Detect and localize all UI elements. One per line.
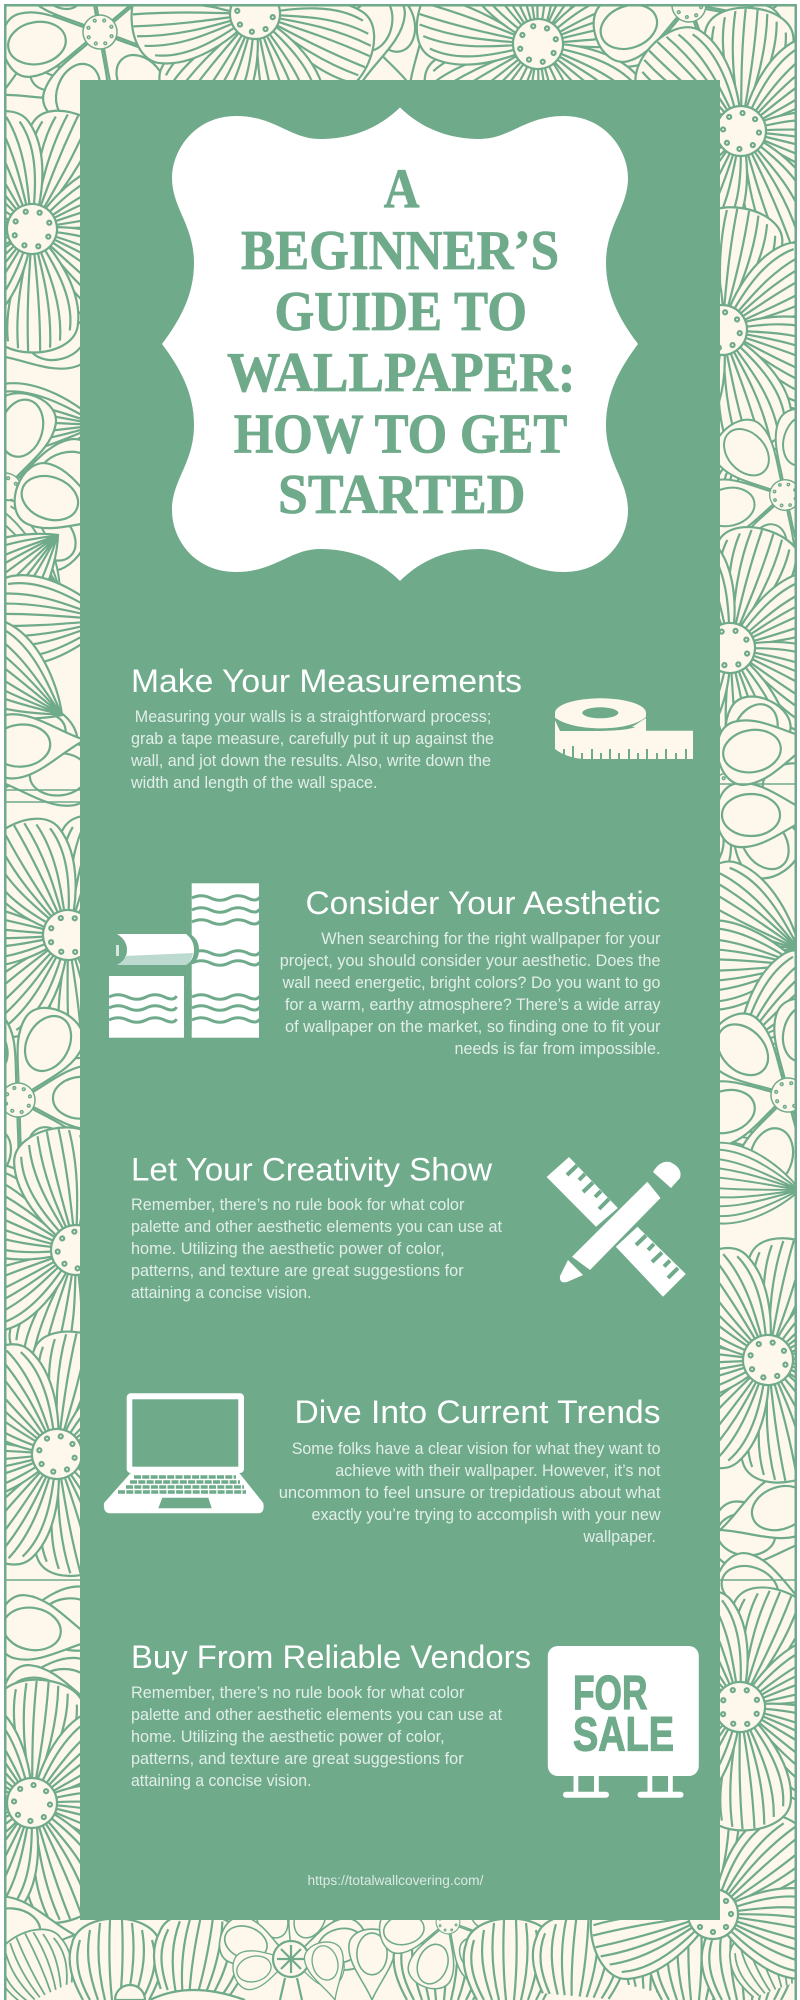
body text: wall need energetic, bright colors? Do you want to go [282,973,660,992]
green main panel [80,80,720,1920]
body text: wall, and jot down the results. Also, write down the [130,751,491,770]
title text: HOW TO GET [234,404,567,466]
body text: Measuring your walls is a straightforward process; [135,707,491,726]
body text [130,707,494,792]
body text [131,1683,502,1790]
section: dive into current trends [104,1393,661,1546]
title text: A [384,158,420,220]
scalloped white plaque [162,108,638,581]
body text: attaining a concise vision. [131,1771,312,1790]
icon: for sale sign: SALE [573,1709,674,1762]
icon: for sale sign [548,1646,699,1798]
section: consider your aesthetic [109,883,661,1058]
source url: https://totalwallcovering.com/ [308,1873,484,1888]
body text: project, you should consider your aesthetic. Does the [280,951,660,970]
body text: for a warm, earthy atmosphere? There’s a wide array [285,995,661,1014]
body text: exactly you’re trying to accomplish with your new [312,1505,661,1524]
heading: Make Your Measurements [131,663,522,699]
body text: grab a tape measure, carefully put it up against the [131,729,494,748]
body text: uncommon to feel unsure or trepidatious about what [279,1483,661,1502]
icon: laptop [104,1393,264,1513]
body text: attaining a concise vision. [131,1283,312,1302]
body text: When searching for the right wallpaper for your [321,929,661,948]
section: let your creativity show [131,1152,686,1302]
body text [280,929,661,1058]
body text: home. Utilizing the aesthetic power of color, [131,1239,445,1258]
icon: for sale sign: FOR [573,1667,648,1720]
body text: wallpaper. [582,1527,656,1546]
heading: Let Your Creativity Show [131,1152,493,1188]
icon: tape measure [553,698,693,759]
heading: Dive Into Current Trends [294,1394,660,1430]
title text: GUIDE TO [274,281,527,343]
body text: of wallpaper on the market, so finding one to fit your [285,1017,661,1036]
body text [279,1439,661,1546]
body text: needs is far from impossible. [454,1039,660,1058]
title badge [162,108,638,581]
heading: Buy From Reliable Vendors [131,1639,531,1675]
body text [131,1195,502,1302]
body text: palette and other aesthetic elements you can use at [131,1705,502,1724]
title text: STARTED [278,464,526,526]
body text: Some folks have a clear vision for what they want to [292,1439,660,1458]
title text [227,158,576,526]
body text: home. Utilizing the aesthetic power of color, [131,1727,445,1746]
body text: achieve with their wallpaper. However, it’s not [335,1461,661,1480]
body text: patterns, and texture are great suggestions for [131,1261,464,1280]
body text: Remember, there’s no rule book for what color [131,1683,465,1702]
title text: WALLPAPER: [227,342,576,404]
icon: crossed ruler and pencil [547,1157,686,1297]
section: make your measurements [130,663,693,792]
icon: wallpaper rolls [109,883,260,1038]
heading: Consider Your Aesthetic [306,885,660,921]
body text: width and length of the wall space. [130,773,378,792]
body text: patterns, and texture are great suggestions for [131,1749,464,1768]
section: buy from reliable vendors [131,1639,699,1798]
body text: palette and other aesthetic elements you can use at [131,1217,502,1236]
title text: BEGINNER’S [241,220,559,282]
body text: Remember, there’s no rule book for what color [131,1195,465,1214]
